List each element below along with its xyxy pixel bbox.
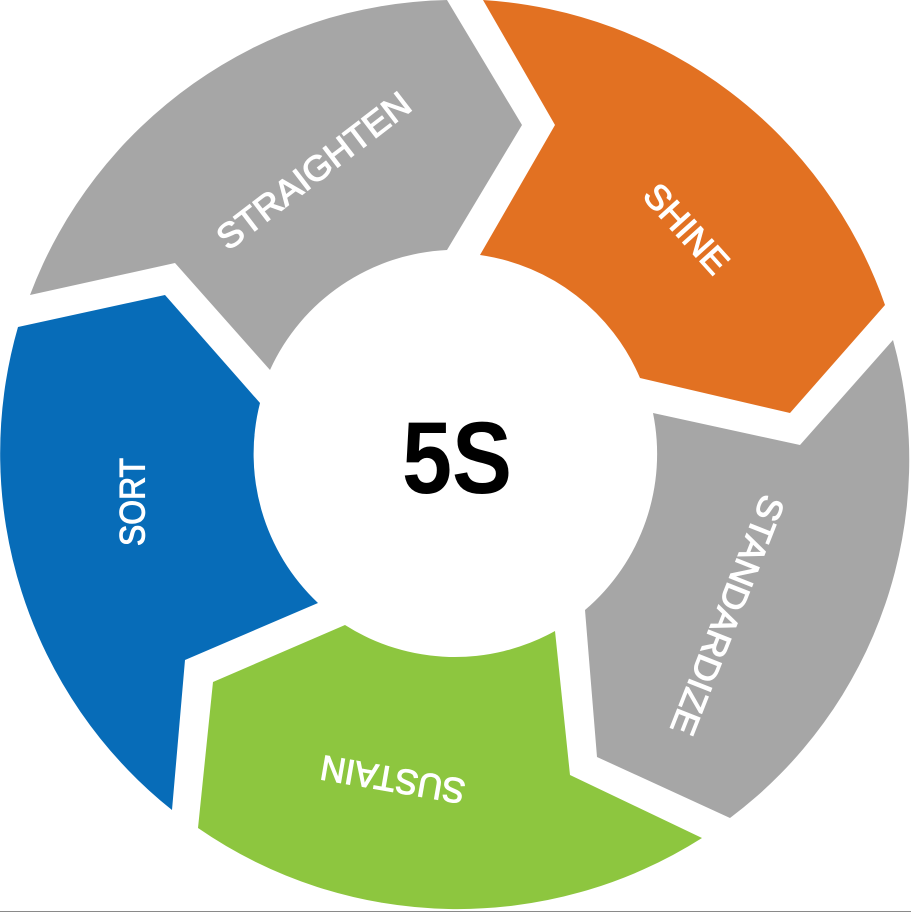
segment: sustain — [198, 625, 702, 909]
bottom edge line — [0, 911, 911, 912]
segment: sort — [0, 295, 318, 810]
label: standardize: STANDARDIZE — [662, 490, 792, 740]
label: straighten: STRAIGHTEN — [209, 84, 419, 258]
label: sustain: SUSTAIN — [318, 747, 468, 811]
label: shine: SHINE — [635, 176, 737, 282]
segment: shine — [480, 0, 885, 413]
center title: 5S — [402, 401, 512, 515]
segment: straighten — [30, 0, 522, 370]
label: sort: SORT — [114, 458, 152, 546]
segment: standardize — [585, 340, 909, 818]
